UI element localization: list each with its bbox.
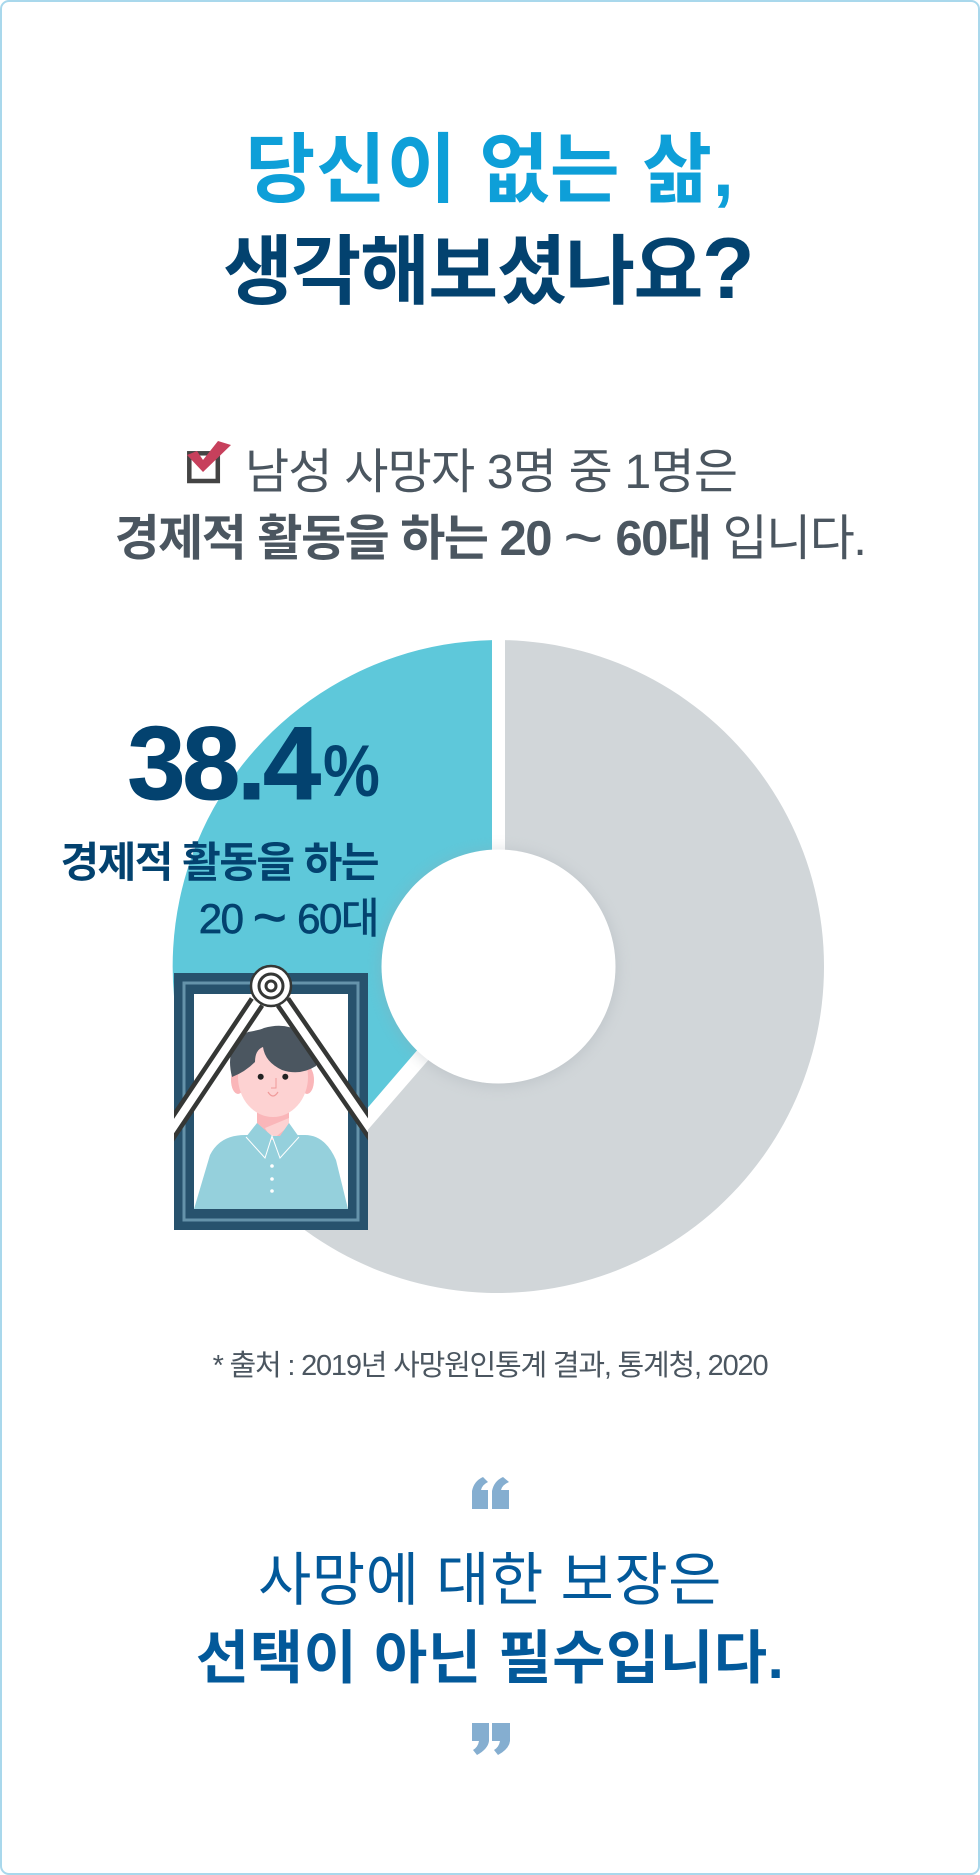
title bbox=[223, 128, 753, 317]
big percent value: % bbox=[323, 729, 380, 812]
icon: closing quote bbox=[472, 1723, 510, 1755]
title line 1: 당신이 없는 삶, bbox=[245, 128, 735, 213]
subtitle line 1: 남성 사망자 3명 중 1명은 bbox=[245, 446, 737, 499]
icon: opening quote bbox=[472, 1477, 509, 1509]
pie label bbox=[61, 839, 378, 951]
closing statement bbox=[196, 1548, 784, 1691]
title line 2: 생각해보셨나요? bbox=[223, 221, 753, 317]
donut hole bbox=[382, 850, 616, 1084]
icon: memorial portrait bbox=[174, 964, 368, 1230]
pie label: 경제적 활동을 하는 bbox=[61, 839, 378, 886]
statement line 2: 선택이 아닌 필수입니다. bbox=[196, 1626, 784, 1691]
big percent value: 38.4 bbox=[128, 706, 318, 822]
person bbox=[194, 1026, 348, 1209]
segment: other 61.6% bbox=[290, 640, 824, 1293]
subtitle line 2: 경제적 활동을 하는 20 ~ 60대 입니다. bbox=[115, 498, 865, 575]
icon: red check in box bbox=[187, 441, 231, 484]
source note: * 출처 : 2019년 사망원인통계 결과, 통계청, 2020 bbox=[213, 1350, 767, 1382]
ribbon bbox=[166, 966, 376, 1138]
pie label: 20 ~ 60대 bbox=[199, 886, 378, 951]
subtitle with checkbox bbox=[115, 441, 865, 575]
segment: 38.4% bbox=[173, 640, 492, 1209]
statement line 1: 사망에 대한 보장은 bbox=[258, 1548, 722, 1613]
donut hole shadow bbox=[380, 849, 618, 1087]
